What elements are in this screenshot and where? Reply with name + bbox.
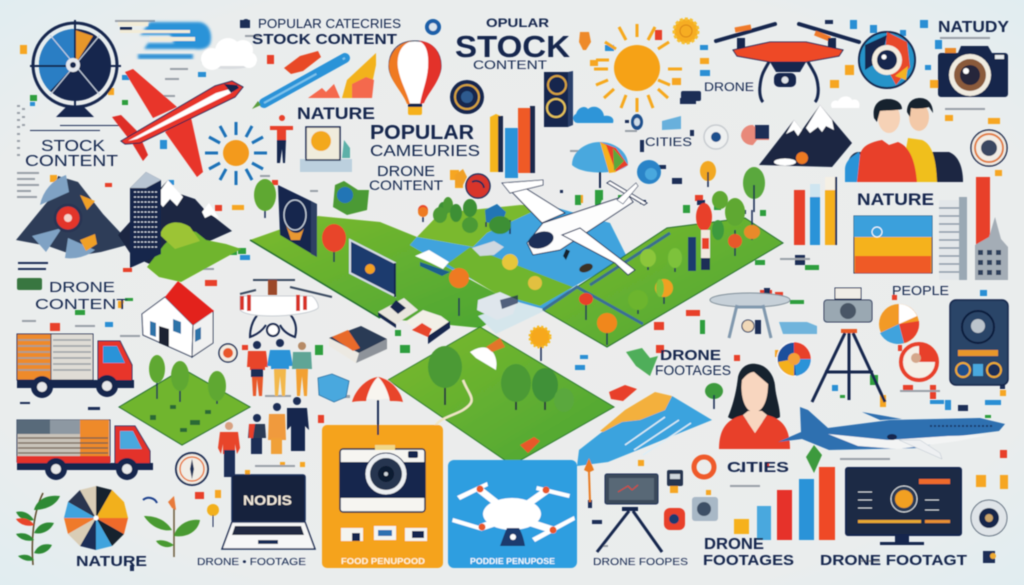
icon: blue pen	[252, 51, 345, 109]
icon: white cloud	[201, 38, 257, 70]
icon: red airplane	[112, 69, 243, 177]
heading: opular stock content: CONTENT	[473, 58, 548, 72]
heading: popular categories stock content: POPULAR CATECRIES	[258, 16, 401, 31]
illustration: city buildings	[939, 177, 1008, 280]
chart: yellow blue red 3d bars	[490, 106, 535, 178]
heading: popular cameuries drone content: CAMEURIES	[370, 143, 480, 160]
text: drone: DRONE	[704, 80, 754, 94]
map: upper green tree band	[417, 205, 547, 247]
illustration: woman in red	[719, 364, 790, 449]
icon: book box	[329, 326, 387, 363]
illustration: group of three people	[247, 339, 312, 396]
text: drone content left	[17, 278, 128, 313]
icon: picture card	[300, 127, 352, 172]
icon: three thumbnails	[341, 526, 427, 541]
text: nature: NATURE	[297, 104, 375, 123]
icon: coast objects	[609, 348, 822, 473]
map: small green lawn with trees	[119, 355, 250, 445]
heading: popular cameuries drone content: CONTENT	[369, 177, 443, 193]
text: drone footages lower	[703, 536, 794, 569]
icon: big orange sun	[594, 24, 682, 112]
icon: beach umbrella	[572, 142, 628, 188]
icon: camera	[340, 445, 425, 512]
icon: orange ring	[694, 457, 714, 477]
icon: laptop	[222, 475, 315, 549]
icon: red drone	[716, 24, 859, 102]
icon: disc speaker	[971, 500, 1007, 563]
icon: hot air balloon	[389, 41, 441, 115]
icon: camera top right	[938, 46, 1008, 97]
icon: open books	[378, 298, 450, 344]
icon: red and white parasol	[352, 377, 403, 435]
icon: small round tokens near cities	[631, 91, 769, 149]
icon: navy billboard	[350, 240, 395, 297]
icon: small blue-rayed sun	[205, 122, 267, 185]
icon: small camera tokens	[664, 470, 718, 530]
icon: navy book panel	[278, 185, 317, 257]
heading: popular cameuries drone content: DRONE	[377, 163, 435, 180]
text: drone foopes: DRONE FOOPES	[593, 556, 688, 568]
illustration: two people	[845, 98, 963, 182]
heading: opular stock content: OPULAR	[486, 16, 549, 30]
icon: blue gadget	[779, 322, 817, 334]
icon: laptop: NODIS	[243, 492, 292, 508]
icon: small tripod screen	[584, 458, 662, 552]
text: cities: CITIES	[727, 459, 789, 476]
icon: gear sun and capsule	[579, 19, 698, 50]
heading: opular stock content: STOCK	[455, 29, 571, 64]
text: drone content left: CONTENT	[35, 296, 128, 313]
icon: orange truck	[17, 334, 134, 398]
text: natudy: NATUDY	[938, 19, 1009, 36]
text: cities: CITIES	[645, 137, 692, 149]
icon: blue ball, yellow tree, green tree	[637, 160, 765, 212]
text: drone content left: DRONE	[49, 279, 115, 296]
icon: dashboard monitor	[846, 468, 961, 545]
panel: nature color card	[854, 216, 932, 273]
icon: target rings	[971, 130, 1007, 166]
chart: orange yellow wedge bars	[308, 53, 376, 98]
panel: blue drone card	[448, 460, 577, 568]
text: drone footagt: DRONE FOOTAGT	[820, 552, 967, 569]
icon: small orange sun	[530, 327, 550, 361]
chart: pie wheels	[777, 304, 937, 380]
heading: opular stock content	[455, 16, 571, 72]
text: nature: NATURE	[857, 190, 934, 209]
panel: orange camera card	[322, 425, 443, 568]
chart: color wheel	[64, 486, 128, 550]
icon: trailer unit on river	[415, 241, 518, 320]
chart: lower bars	[734, 467, 835, 540]
caption: FOOD PENUPOOD	[341, 557, 425, 566]
caption: PODDIE PENUPOSE	[470, 557, 556, 566]
icon: white quadcopter	[240, 280, 332, 337]
text: drone footages: DRONE	[660, 347, 721, 364]
icon: right plant	[143, 496, 219, 557]
icon: white drone	[452, 482, 575, 546]
icon: compass	[176, 344, 237, 485]
map: pale riverbank	[478, 302, 546, 334]
map: upper left green strip	[250, 216, 520, 328]
text: stock content: CONTENT	[25, 153, 118, 170]
icon: red truck	[17, 420, 153, 480]
icon: house	[142, 281, 214, 357]
icon: device panel	[950, 300, 1008, 385]
icon: small clouds	[573, 96, 860, 123]
text: drone footages lower: DRONE	[704, 536, 764, 553]
text: people: PEOPLE	[892, 283, 949, 298]
text: stock content	[25, 138, 118, 170]
icon: blue shard	[318, 374, 349, 402]
icon: blue brush banner	[118, 22, 211, 59]
text: drone footages lower: FOOTAGES	[703, 552, 794, 569]
text: nature bottom: NATURE	[76, 553, 147, 570]
map: right green field	[543, 218, 783, 347]
chart: nature bars	[794, 177, 837, 245]
icon: flat saucer drone	[710, 293, 790, 338]
icon: abstract lens circle	[859, 32, 915, 88]
text: drone footage: DRONE • FOOTAGE	[197, 556, 306, 568]
map: beach and sea	[577, 392, 712, 466]
text: stock content: STOCK	[41, 138, 105, 155]
icon: person with arms out	[270, 115, 293, 163]
map: river and lake	[410, 205, 627, 310]
illustration: blue airplane	[778, 407, 1005, 459]
icon: mountain	[759, 105, 852, 167]
icon: left leafy plant	[16, 493, 60, 565]
illustration: white airplane over lake	[502, 180, 647, 275]
map: central green diamond with path	[388, 327, 614, 465]
icon: red badge with leaf	[455, 169, 490, 198]
icon: speaker	[544, 71, 573, 127]
icon: navy and white posts on field	[688, 230, 710, 271]
illustration: tower and mountains	[118, 172, 241, 282]
icon: radar dish	[30, 20, 121, 117]
heading: popular cameuries drone content	[369, 122, 480, 193]
heading: popular categories stock content: STOCK CONTENT	[252, 31, 397, 48]
map: green band between river and lake	[447, 247, 573, 306]
text: drone footages	[655, 347, 731, 378]
map trees	[254, 179, 760, 345]
text: drone footages: FOOTAGES	[655, 363, 731, 378]
heading: popular cameuries drone content: POPULAR	[370, 122, 475, 144]
icon: tripod camera	[812, 288, 885, 402]
icon: round badges	[242, 19, 484, 114]
icon: dial on mountain	[16, 175, 131, 258]
illustration: group of four people	[218, 397, 309, 477]
heading: popular categories stock content	[252, 16, 401, 48]
